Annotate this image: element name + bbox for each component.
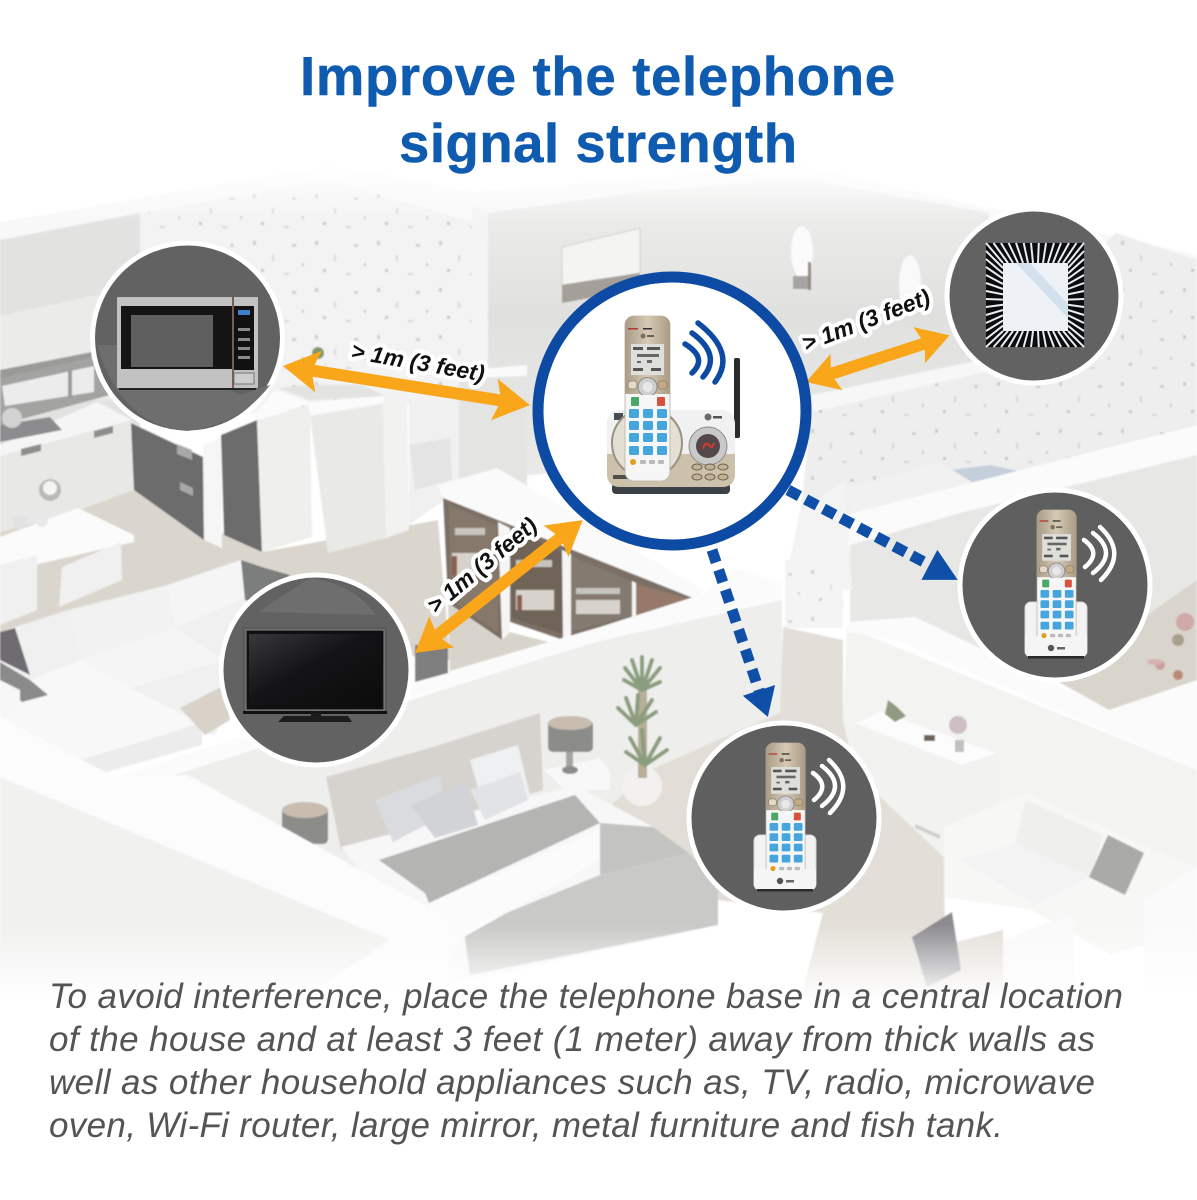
potted tree: [618, 657, 667, 806]
icon: blue signal waves: [685, 323, 723, 382]
icon: flat screen TV: [243, 627, 387, 722]
orange arrow: microwave to base: [280, 345, 533, 426]
kitchen floor: [0, 490, 450, 660]
caption text block: well as other household appliances such as, TV, radio, microwave: [49, 1063, 1095, 1102]
white door panel: [785, 480, 852, 590]
nightstands and lamps: [282, 716, 610, 844]
roof band: [0, 165, 1197, 300]
icon: cordless handset with signal waves: [754, 743, 843, 892]
distance label: microwave: > 1m (3 feet): [349, 337, 487, 387]
speckled wall: [140, 180, 472, 420]
blue dashed arrow to right handset: [780, 475, 966, 595]
wall sconces and doorway: [791, 226, 813, 290]
toys: [1147, 613, 1194, 680]
caption text block: [49, 977, 1123, 1145]
icon: sunburst mirror: [986, 243, 1084, 347]
circle: right handset: [960, 490, 1150, 680]
orange arrow: base to TV: [403, 504, 595, 669]
centre and right back walls: [488, 178, 1000, 480]
living room sofa: [0, 560, 290, 775]
foreground left wall: [0, 717, 448, 1000]
bathtub: [950, 465, 1047, 492]
bed: [326, 713, 718, 985]
white room wall: [843, 627, 1197, 900]
circle: mirror: [947, 209, 1121, 383]
bedroom wall face: [126, 590, 782, 970]
backsplash and counter: [0, 352, 92, 379]
central circle: telephone base: [538, 277, 806, 545]
white counter blocks: [257, 405, 312, 552]
bookshelf: [438, 468, 703, 640]
bath half wall: [845, 425, 1197, 545]
speckled hall panel: [785, 560, 843, 628]
title: [300, 46, 895, 174]
distance label: TV: > 1m (3 feet): [422, 512, 542, 618]
right bath wall: [800, 233, 1197, 520]
blue dashed arrow to bottom handset: [696, 545, 784, 722]
fades: [0, 160, 1197, 222]
office chair: [912, 912, 961, 987]
distance label: mirror: > 1m (3 feet): [798, 284, 934, 356]
title: Improve the telephone: [300, 46, 895, 107]
dining set: [0, 479, 134, 625]
white cabinet: [855, 700, 997, 857]
icon: cordless handset with signal waves: [1025, 510, 1114, 658]
circle: bottom handset: [689, 723, 879, 913]
white armchair sofa: [944, 793, 1197, 1000]
right rooms floor: [780, 627, 1003, 1000]
kitchen back wall: [0, 213, 140, 470]
potted plant: [312, 347, 325, 370]
circle: television: [221, 575, 411, 765]
caption text block: of the house and at least 3 feet (1 meter) away from thick walls as: [49, 1020, 1095, 1059]
circle: microwave: [92, 243, 282, 433]
caption text block: To avoid interference, place the telephone base in a central location: [49, 977, 1123, 1016]
bedroom wall top: [115, 568, 782, 790]
orange arrow: base to mirror: [800, 317, 955, 400]
top-right play floor: [1055, 580, 1197, 710]
icon: telephone base station: [607, 316, 740, 494]
title: signal strength: [399, 113, 797, 174]
caption text block: oven, Wi-Fi router, large mirror, metal furniture and fish tank.: [49, 1106, 1003, 1145]
bedroom floor: [600, 712, 823, 913]
dark cabinets: [131, 423, 204, 540]
icon: microwave oven: [117, 297, 258, 390]
